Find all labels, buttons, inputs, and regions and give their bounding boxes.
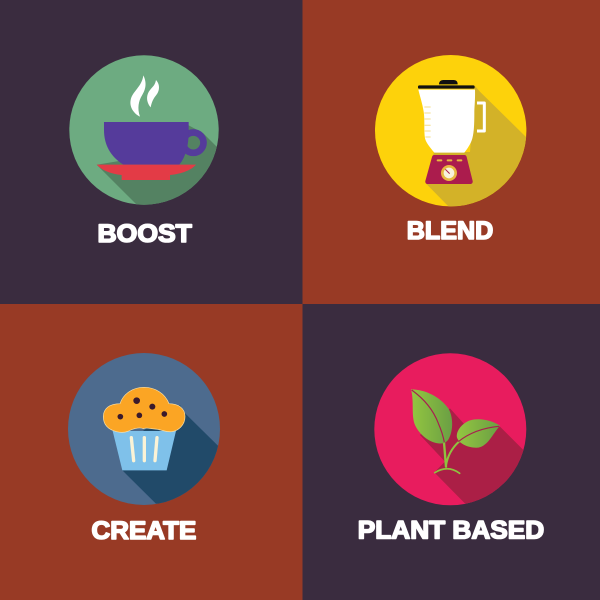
label: plant based: PLANT BASED — [358, 516, 544, 544]
label: create: CREATE — [92, 517, 196, 545]
jar — [418, 90, 475, 153]
panel: blend background — [302, 0, 600, 304]
muffin top — [103, 387, 185, 432]
panel: plant based background — [302, 304, 600, 600]
cup handle — [183, 132, 203, 153]
stems — [435, 442, 460, 473]
cup body — [104, 122, 189, 165]
measure ticks — [424, 106, 431, 138]
saucer — [97, 165, 196, 180]
icon: muffin badge — [68, 353, 220, 505]
buttons — [437, 159, 462, 161]
chocolate chips — [117, 397, 167, 419]
jar handle — [477, 103, 484, 131]
blender base — [425, 155, 473, 184]
icon: plant badge — [374, 353, 526, 506]
large leaf — [411, 389, 452, 443]
wrapper stripes — [131, 438, 157, 461]
icon: coffee cup badge — [69, 55, 219, 205]
panel: create background — [0, 304, 302, 600]
large leaf vein — [412, 390, 444, 442]
panel: boost background — [0, 0, 302, 304]
small leaf — [457, 419, 500, 448]
label: blend: BLEND — [407, 217, 493, 245]
label: boost: BOOST — [98, 220, 192, 248]
dial — [441, 165, 457, 181]
lid — [418, 80, 475, 89]
icon: blender badge — [375, 55, 526, 206]
muffin wrapper — [113, 431, 176, 470]
steam — [130, 75, 159, 117]
small leaf vein — [458, 426, 499, 442]
